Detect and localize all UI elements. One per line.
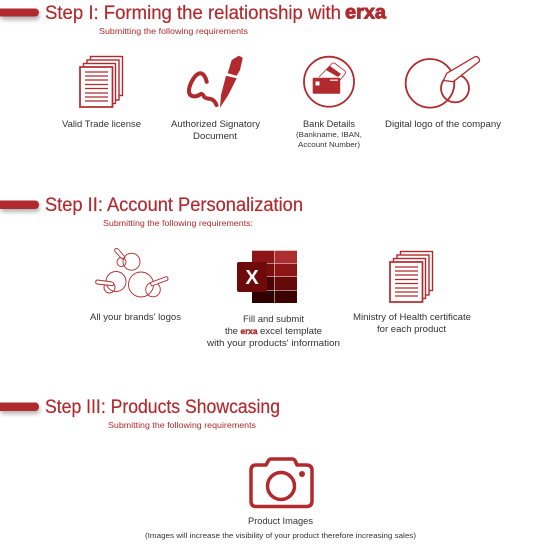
icon: camera	[251, 459, 312, 506]
label: valid trade license: Valid Trade license	[62, 119, 141, 130]
step 2 subtitle: Submitting the following requirements:	[103, 218, 253, 228]
step 2 title: Step II: Account Personalization	[45, 195, 303, 216]
note: product images: (Images will increase the visibility of your product therefore increasing sales)	[145, 531, 417, 540]
icon: pen signature	[189, 56, 243, 108]
item: bank details: Account Number)	[298, 140, 361, 149]
item: brand logos	[90, 248, 181, 323]
label: product images: Product Images	[248, 516, 313, 527]
step 2 header	[0, 195, 303, 228]
item: bank details: (Bankname, IBAN,	[296, 130, 362, 139]
item: excel template: erxa	[240, 326, 258, 336]
step 1 subtitle: Submitting the following requirements	[99, 26, 248, 36]
icon: certificate stack	[390, 252, 432, 302]
step 3 title: Step III: Products Showcasing	[45, 397, 280, 418]
icon: bank card	[304, 57, 354, 107]
step 3 subtitle: Submitting the following requirements	[108, 420, 256, 430]
erxa logo: erxa	[345, 2, 386, 24]
label: digital logo: Digital logo of the company	[385, 119, 501, 130]
item: excel template	[206, 251, 340, 349]
label: ministry of health certificate: Ministry of Health certificate	[353, 312, 471, 323]
item: ministry of health certificate	[353, 252, 471, 335]
item: excel template: with your products' information	[206, 338, 340, 349]
item: ministry of health certificate: for each product	[377, 324, 446, 335]
item: excel template: the	[225, 326, 238, 337]
item: authorized signatory document	[171, 56, 260, 142]
item: excel template: excel template	[260, 326, 322, 337]
icon: document stack	[80, 56, 122, 107]
icon: circles and pencil	[406, 57, 480, 108]
step 2 bar	[0, 200, 40, 212]
item: valid trade license	[62, 56, 141, 130]
label: excel template: Fill and submit	[243, 314, 304, 325]
step 3 header	[0, 397, 280, 430]
label: brand logos: All your brands' logos	[90, 312, 181, 323]
icon: three logo sketches	[96, 248, 168, 297]
step 1 bar	[0, 8, 40, 20]
step 1 header	[0, 2, 386, 36]
item: authorized signatory document: Document	[193, 131, 237, 142]
step 3 bar	[0, 402, 40, 414]
step 1 title: Step I: Forming the relationship with	[45, 3, 341, 24]
label: bank details: Bank Details	[303, 119, 355, 130]
label: authorized signatory document: Authorized Signatory	[171, 119, 260, 130]
item: bank details	[296, 57, 362, 149]
item: digital logo	[385, 57, 501, 130]
item: product images	[145, 459, 417, 540]
icon: excel: X	[245, 267, 259, 289]
